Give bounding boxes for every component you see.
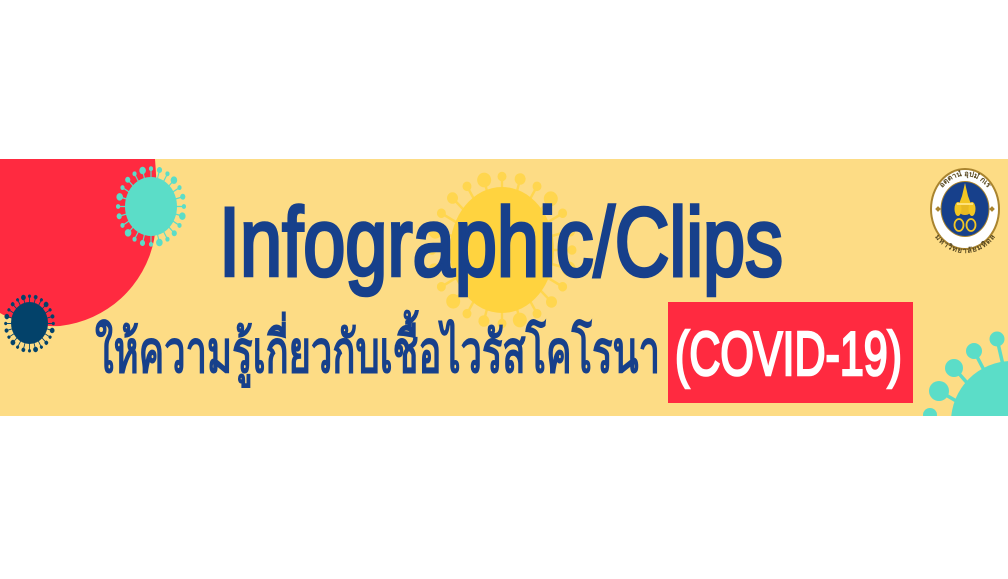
red corner circle — [0, 159, 157, 326]
icon: navy virus — [4, 294, 55, 353]
red box label — [668, 302, 913, 403]
icon: large teal virus in corner — [923, 332, 1008, 416]
icon: teal virus — [116, 166, 186, 247]
logo emblem — [935, 183, 995, 231]
title: Infographic/Clips — [219, 188, 783, 296]
label text: (COVID-19) — [675, 320, 902, 389]
subtitle in Thai: ให้ความรู้เกี่ยวกับเชื้อไวรัสโคโรนา — [95, 311, 660, 387]
logo: Mahidol University seal — [930, 168, 1000, 254]
logo motto text: อตฺตานํ อุปมํ กเร — [940, 170, 991, 188]
icon: yellow virus — [427, 172, 577, 328]
logo university name text: มหาวิทยาลัยมหิดล — [935, 234, 995, 254]
banner background — [0, 159, 1008, 416]
